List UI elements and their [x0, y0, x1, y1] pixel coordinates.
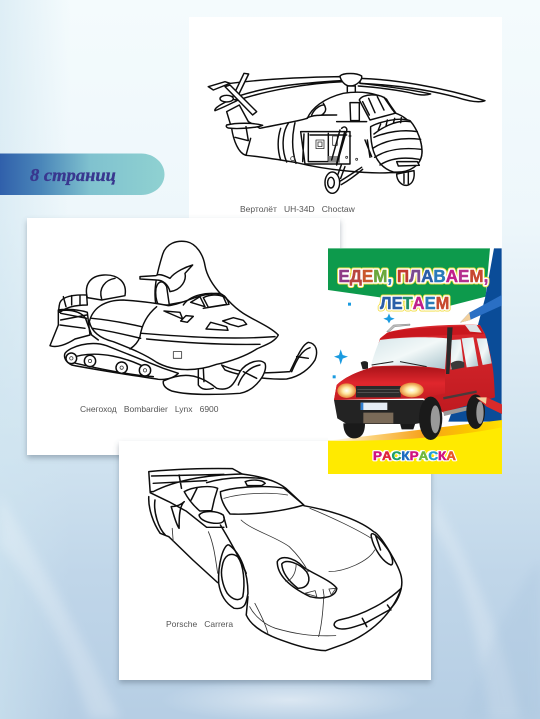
cover: title: ЕДЕМ, ПЛАВАЕМ,: [338, 266, 488, 286]
cover: blue pencil: [460, 295, 502, 323]
cover: title: ЛЕТАЕМ: [380, 293, 449, 313]
cover: subtitle: РАСКРАСКА: [373, 450, 457, 463]
helicopter drawing: [208, 73, 485, 193]
cover: title: ЛЕТАЕМ: [380, 293, 449, 313]
caption: helicopter: Вертолёт UH-34D Choctaw: [240, 204, 356, 214]
cover: title: ЛЕТАЕМ: [380, 293, 449, 313]
cover: red pencil: [476, 397, 502, 414]
cover: ground: [328, 420, 502, 450]
Porsche drawing: [149, 468, 402, 651]
caption: snowmobile: Снегоход Bombardier Lynx 6900: [80, 404, 219, 414]
cover: blue stripe: [448, 248, 502, 422]
cover: title: ЕДЕМ, ПЛАВАЕМ,: [338, 266, 488, 286]
panel: Porsche page: [119, 441, 431, 680]
book cover: [328, 248, 502, 474]
panel: snowmobile page: [27, 218, 340, 455]
label: 8 pages: 8 страниц: [30, 165, 116, 185]
cover: stars: [333, 303, 395, 378]
cover: subtitle: РАСКРАСКА: [373, 450, 457, 463]
cover: green band: [328, 248, 490, 307]
cover: title: ЕДЕМ, ПЛАВАЕМ,: [338, 266, 488, 286]
cover: red car: [334, 324, 495, 440]
cover: title: [338, 266, 488, 313]
panel: helicopter page: [189, 17, 502, 255]
snowmobile drawing: [50, 241, 317, 394]
caption: Porsche: Porsche Carrera: [166, 619, 233, 629]
cover: yellow strip: [328, 427, 502, 474]
tab: 8 pages: [0, 154, 164, 195]
